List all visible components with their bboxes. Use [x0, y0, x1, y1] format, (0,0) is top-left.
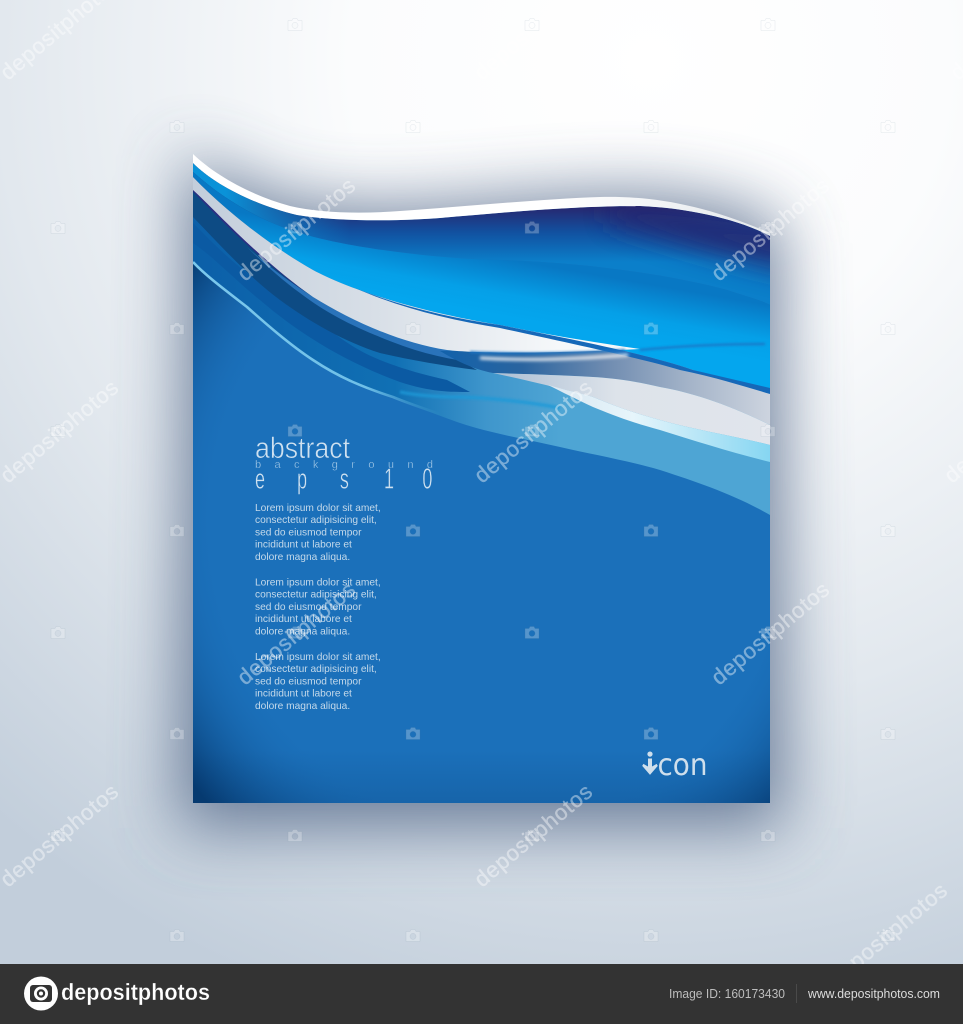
heading: abstract background eps 10 — [255, 432, 433, 496]
text block: paragraph 3: consectetur adipisicing elit, — [255, 664, 377, 675]
image id: Image ID: 160173430 — [669, 987, 785, 1001]
watermark: depositphotos text: depositphotos — [232, 173, 360, 286]
wave: right navy shading — [610, 213, 770, 286]
icon logo — [642, 748, 708, 783]
logo wordmark: depositphotos — [61, 979, 210, 1005]
footer bar — [0, 964, 963, 1024]
watermark: depositphotos text: depositphotos — [469, 779, 597, 892]
website url: www.depositphotos.com — [807, 987, 940, 1001]
icon word: con — [658, 748, 708, 783]
icon: arrow i — [642, 752, 658, 775]
card drop shadow — [178, 150, 785, 828]
text block: paragraph 2: Lorem ipsum dolor sit amet, — [255, 578, 381, 588]
wave: white band — [193, 177, 640, 353]
background: background — [255, 459, 433, 471]
text block: paragraph 3: incididunt ut labore et — [255, 689, 352, 700]
wave: grey band — [440, 348, 770, 425]
wave: dark blue line above white band — [355, 288, 770, 394]
text block: paragraph 2: dolore magna aliqua. — [255, 626, 350, 637]
wave: thin bright line — [193, 262, 440, 414]
text block: paragraph 2: incididunt ut labore et — [255, 614, 352, 625]
text block: paragraph 3: dolore magna aliqua. — [255, 701, 350, 712]
wave: light grey band — [493, 373, 770, 445]
wave: left cyan fade — [193, 163, 338, 240]
wave: dark navy tapered band — [193, 190, 477, 370]
wave: darker inner wedge — [228, 257, 470, 392]
wave: cyan soft line — [400, 392, 560, 408]
white top edge — [193, 154, 770, 236]
watermark: depositphotos text: depositphotos — [824, 878, 952, 991]
text block: paragraph 3: Lorem ipsum dolor sit amet, — [255, 652, 381, 663]
text block: paragraph 1: Lorem ipsum dolor sit amet, — [255, 503, 381, 514]
watermark: depositphotos text: depositphotos — [232, 577, 360, 690]
text block: paragraph 1: dolore magna aliqua. — [255, 552, 350, 563]
card vignette — [193, 150, 770, 803]
text block: paragraph 1: sed do eiusmod tempor — [255, 527, 362, 538]
text block: paragraph 3: sed do eiusmod tempor — [255, 676, 362, 687]
watermark: depositphotos text: depositphotos — [706, 173, 834, 286]
wave: bright cyan band — [193, 172, 770, 393]
wave: mid-blue translucent band — [193, 190, 770, 515]
wave: navy edge line — [193, 190, 305, 290]
panel: blue card with waves — [193, 150, 800, 803]
watermark: depositphotos text: depositphotos — [706, 577, 834, 690]
wave: blue strip under white band — [248, 248, 456, 360]
wave: navy top band — [246, 198, 770, 305]
card bottom shading — [254, 776, 746, 803]
icon: depositphotos camera logo — [24, 976, 58, 1010]
text block: paragraph 2: consectetur adipisicing elit, — [255, 590, 377, 601]
text block: paragraph 1: consectetur adipisicing elit, — [255, 515, 377, 526]
wave: ice blue strip — [548, 385, 770, 462]
watermark: depositphotos text: depositphotos — [469, 375, 597, 488]
wave: blue highlight lines — [470, 344, 765, 353]
card base — [193, 150, 770, 803]
eps 10: eps10 — [255, 463, 432, 496]
text block: paragraph 1: incididunt ut labore et — [255, 540, 352, 551]
text block: paragraph 2: sed do eiusmod tempor — [255, 602, 362, 613]
watermark: camera icons — [51, 18, 895, 942]
abstract: abstract — [255, 432, 351, 465]
wave: white highlight — [480, 355, 628, 359]
